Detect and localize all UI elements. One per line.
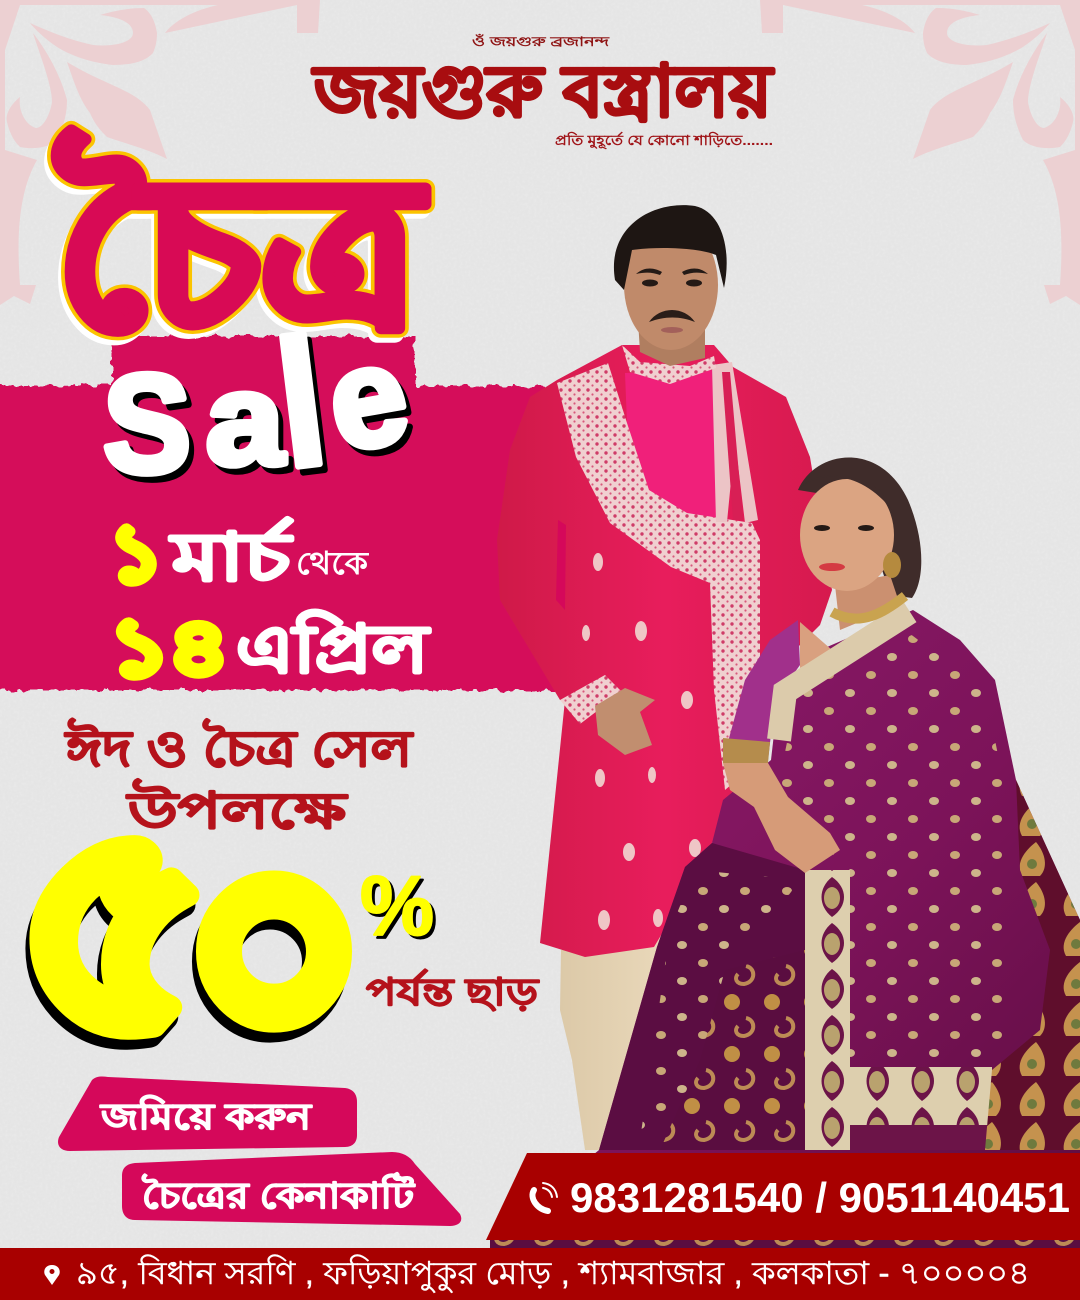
number shadow: ০ — [178, 789, 362, 1125]
lips — [661, 327, 683, 333]
number shadow — [15, 780, 362, 1125]
icon: phone — [532, 1183, 557, 1211]
icon: location pin — [44, 1265, 60, 1285]
face — [624, 220, 718, 350]
number fill — [19, 770, 366, 1115]
headline: Sale: S — [103, 345, 191, 502]
saree — [490, 610, 1080, 1248]
date: from 1 March: থেকে — [296, 545, 370, 581]
headline: Sale: a — [211, 352, 291, 498]
saree pallu — [985, 780, 1080, 1150]
person: woman in saree — [490, 458, 1080, 1248]
pill: chaitra shopping — [122, 1152, 461, 1226]
blouse sleeve — [723, 620, 800, 760]
number shadow: ৫ — [15, 780, 203, 1097]
collar — [622, 345, 716, 384]
skin at neckline — [800, 622, 832, 668]
date: to 14 April: এপ্রিল — [236, 609, 431, 686]
occasion text — [64, 718, 414, 839]
necklace — [832, 596, 905, 619]
neck — [835, 575, 900, 630]
saree lower border — [850, 1067, 992, 1125]
occasion text: ঈদ ও চৈত্র সেল — [64, 718, 414, 777]
eyes — [814, 525, 874, 531]
chest panel — [625, 370, 728, 525]
discount: 50 percent: % — [360, 859, 434, 953]
phone bar — [486, 1153, 1080, 1240]
earring — [883, 552, 901, 578]
eyes and brows — [636, 268, 708, 286]
pill: enjoy — [58, 1076, 357, 1151]
sleeve cuff — [560, 675, 622, 724]
tagline: প্রতি মুহূর্তে যে কোনো শাড়িতে....... — [555, 131, 773, 150]
ornament: top left corner — [0, 0, 320, 305]
moustache — [649, 310, 695, 322]
arm and hand — [723, 763, 840, 873]
forehead hair — [798, 475, 892, 510]
hair — [798, 458, 921, 598]
lips — [819, 563, 845, 571]
hand — [595, 688, 655, 755]
pill: enjoy: জমিয়ে করুন — [99, 1095, 313, 1137]
placket — [712, 362, 758, 523]
kurta — [497, 345, 832, 957]
percent sign: % — [363, 862, 437, 956]
headline: chaitra: চৈত্র — [57, 131, 426, 369]
headline: Sale: l — [267, 301, 336, 506]
headline: Sale: S — [108, 351, 196, 508]
kurta buttis — [582, 553, 701, 930]
number fill: ০ — [182, 779, 366, 1115]
headline: Sale: e — [317, 313, 419, 481]
embroidered sash — [557, 363, 760, 790]
pill: chaitra shopping: চৈত্রের কেনাকাটি — [142, 1172, 416, 1216]
pink torn banner — [0, 336, 570, 690]
trousers — [560, 935, 670, 1150]
shop name: জয়গুরু বস্ত্রালয় — [311, 52, 775, 132]
headline: Sale: a — [206, 346, 286, 492]
address bar — [0, 1248, 1080, 1300]
saree vertical border — [805, 870, 850, 1150]
number fill: ৫ — [19, 770, 207, 1087]
neck — [638, 320, 705, 366]
ornament: top right corner — [760, 0, 1080, 305]
headline: chaitra: চৈত্র — [53, 137, 422, 375]
saree gold work — [660, 950, 805, 1150]
date: from 1 March — [110, 512, 370, 597]
saree shoulder border — [779, 612, 910, 740]
body gap under arm — [556, 520, 566, 610]
date: from 1 March: ১ — [110, 512, 162, 597]
person: man in kurta — [497, 205, 832, 1150]
date: to 14 April — [110, 606, 431, 691]
phone numbers: 9831281540 / 9051140451 — [570, 1174, 1070, 1221]
face — [800, 479, 894, 591]
header: shop logo — [311, 33, 775, 150]
headline: Sale: e — [322, 319, 424, 487]
address: ৯৫, বিধান সরণি , ফড়িয়াপুকুর মোড় , শ্যামবাজার , কলকাতা - ৭০০০০৪ — [76, 1254, 1030, 1293]
up to off label: পর্যন্ত ছাড় — [366, 968, 540, 1014]
headline: Sale — [103, 301, 424, 512]
occasion text: উপলক্ষে — [125, 778, 348, 839]
hair — [614, 205, 727, 290]
saree motifs — [775, 630, 1010, 1060]
blessing line: ওঁ জয়গুরু ব্রজানন্দ — [472, 33, 610, 49]
headline: Sale: l — [272, 307, 341, 512]
saree bottom strip — [490, 1238, 1080, 1248]
date: to 14 April: ১৪ — [110, 606, 228, 691]
discount: 50 percent — [15, 770, 540, 1125]
saree pleats — [599, 843, 805, 1150]
date: from 1 March: মার্চ — [169, 517, 293, 594]
headline: chaitra: চৈত্র — [57, 131, 426, 369]
